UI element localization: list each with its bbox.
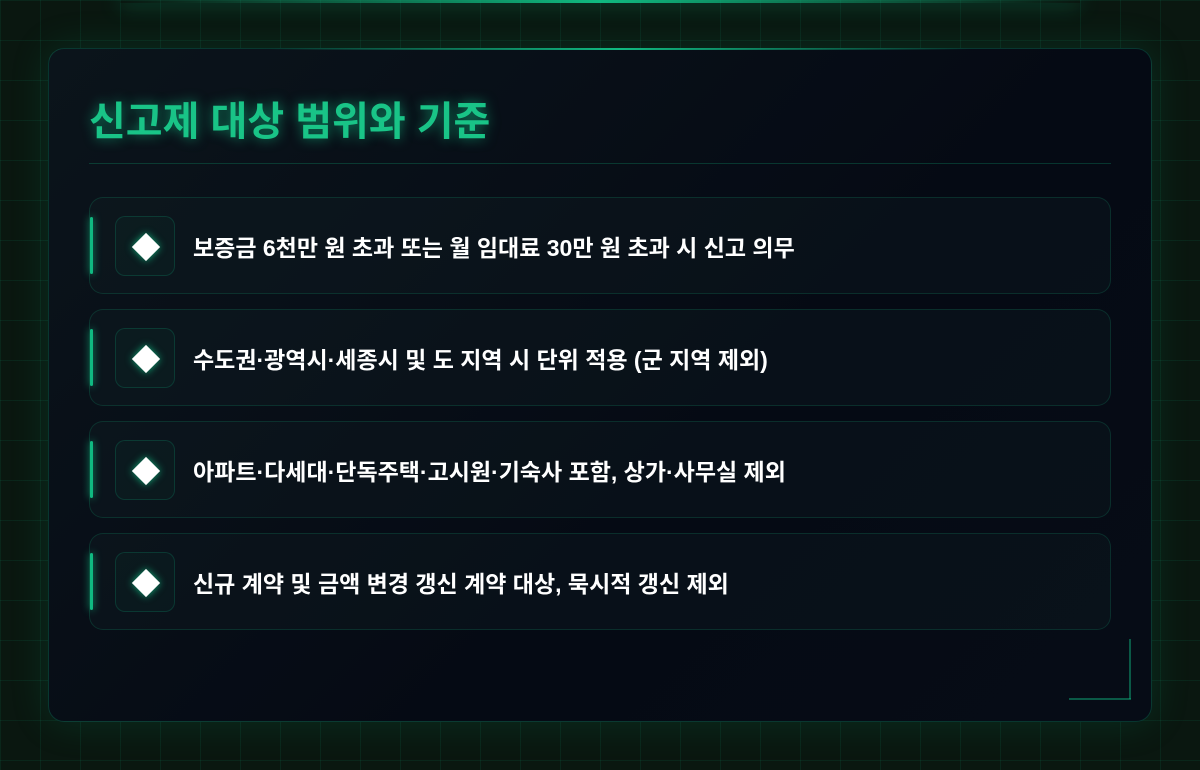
item 3	[89, 421, 1111, 518]
icon: diamond	[115, 440, 175, 500]
icon: diamond	[115, 552, 175, 612]
title: 신고제 대상 범위와 기준	[89, 100, 490, 144]
item 4	[89, 533, 1111, 630]
text 2: 수도권·광역시·세종시 및 도 지역 시 단위 적용 (군 지역 제외)	[193, 347, 768, 373]
text 4: 신규 계약 및 금액 변경 갱신 계약 대상, 묵시적 갱신 제외	[193, 571, 729, 597]
item 2	[89, 309, 1111, 406]
text 1: 보증금 6천만 원 초과 또는 월 임대료 30만 원 초과 시 신고 의무	[193, 235, 795, 261]
text 3: 아파트·다세대·단독주택·고시원·기숙사 포함, 상가·사무실 제외	[193, 459, 786, 485]
item 1	[89, 197, 1111, 294]
corner decoration	[1129, 639, 1131, 699]
icon: diamond	[115, 216, 175, 276]
icon: diamond	[115, 328, 175, 388]
